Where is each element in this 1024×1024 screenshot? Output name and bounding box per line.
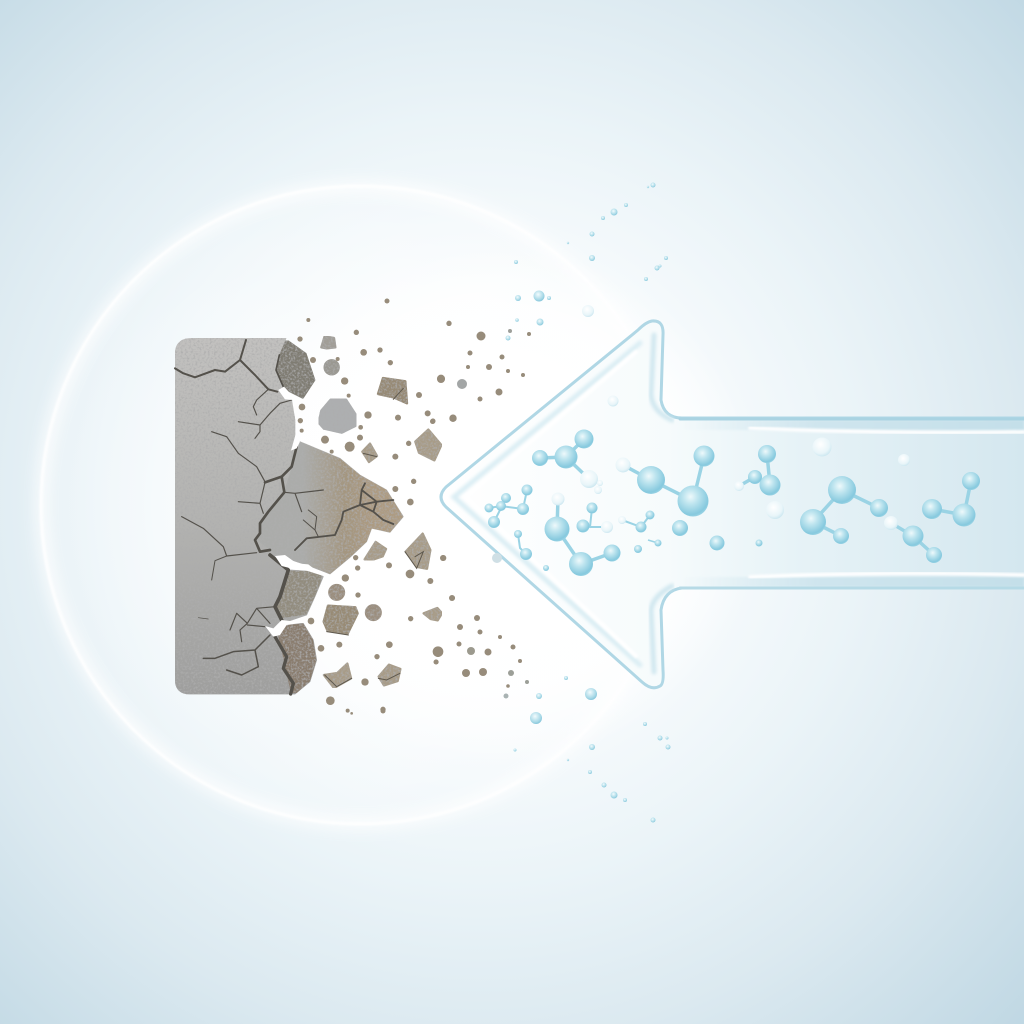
molecule 8 bbox=[484, 484, 532, 528]
molecule 7 bbox=[544, 492, 620, 576]
rock dust particles near block bbox=[297, 318, 457, 715]
water droplets bottom spray bbox=[514, 676, 670, 822]
molecule 11 bbox=[618, 510, 654, 532]
arrow body bbox=[441, 321, 1024, 688]
main rock wall bbox=[175, 338, 403, 694]
rock dust particles drifting toward arrow bbox=[380, 298, 531, 714]
shaft tinted bands bbox=[680, 420, 1024, 587]
glowing halo ring bbox=[40, 185, 760, 825]
molecule 12 bbox=[634, 540, 662, 553]
arrow inner highlights bbox=[454, 335, 1024, 672]
molecule 5 bbox=[884, 516, 942, 563]
water droplets top spray bbox=[506, 182, 668, 340]
crack lines bbox=[175, 340, 393, 694]
molecule 2 bbox=[616, 446, 714, 516]
molecule 9 bbox=[514, 530, 532, 560]
loose bubbles in arrow bbox=[492, 396, 910, 571]
cracked rock block bbox=[175, 318, 457, 715]
water molecules inside arrow bbox=[484, 430, 980, 576]
fragment crack details bbox=[325, 388, 423, 687]
dark broken edge chips bbox=[277, 341, 321, 693]
molecule 3 bbox=[734, 445, 780, 496]
molecule 4 bbox=[800, 476, 888, 544]
flying rock fragments bbox=[319, 336, 442, 688]
white fracture gaps bbox=[265, 387, 323, 637]
molecule 10 bbox=[576, 502, 613, 533]
molecule 1 bbox=[532, 430, 598, 488]
glass arrow bbox=[441, 321, 1024, 688]
molecule 6 bbox=[922, 472, 980, 526]
